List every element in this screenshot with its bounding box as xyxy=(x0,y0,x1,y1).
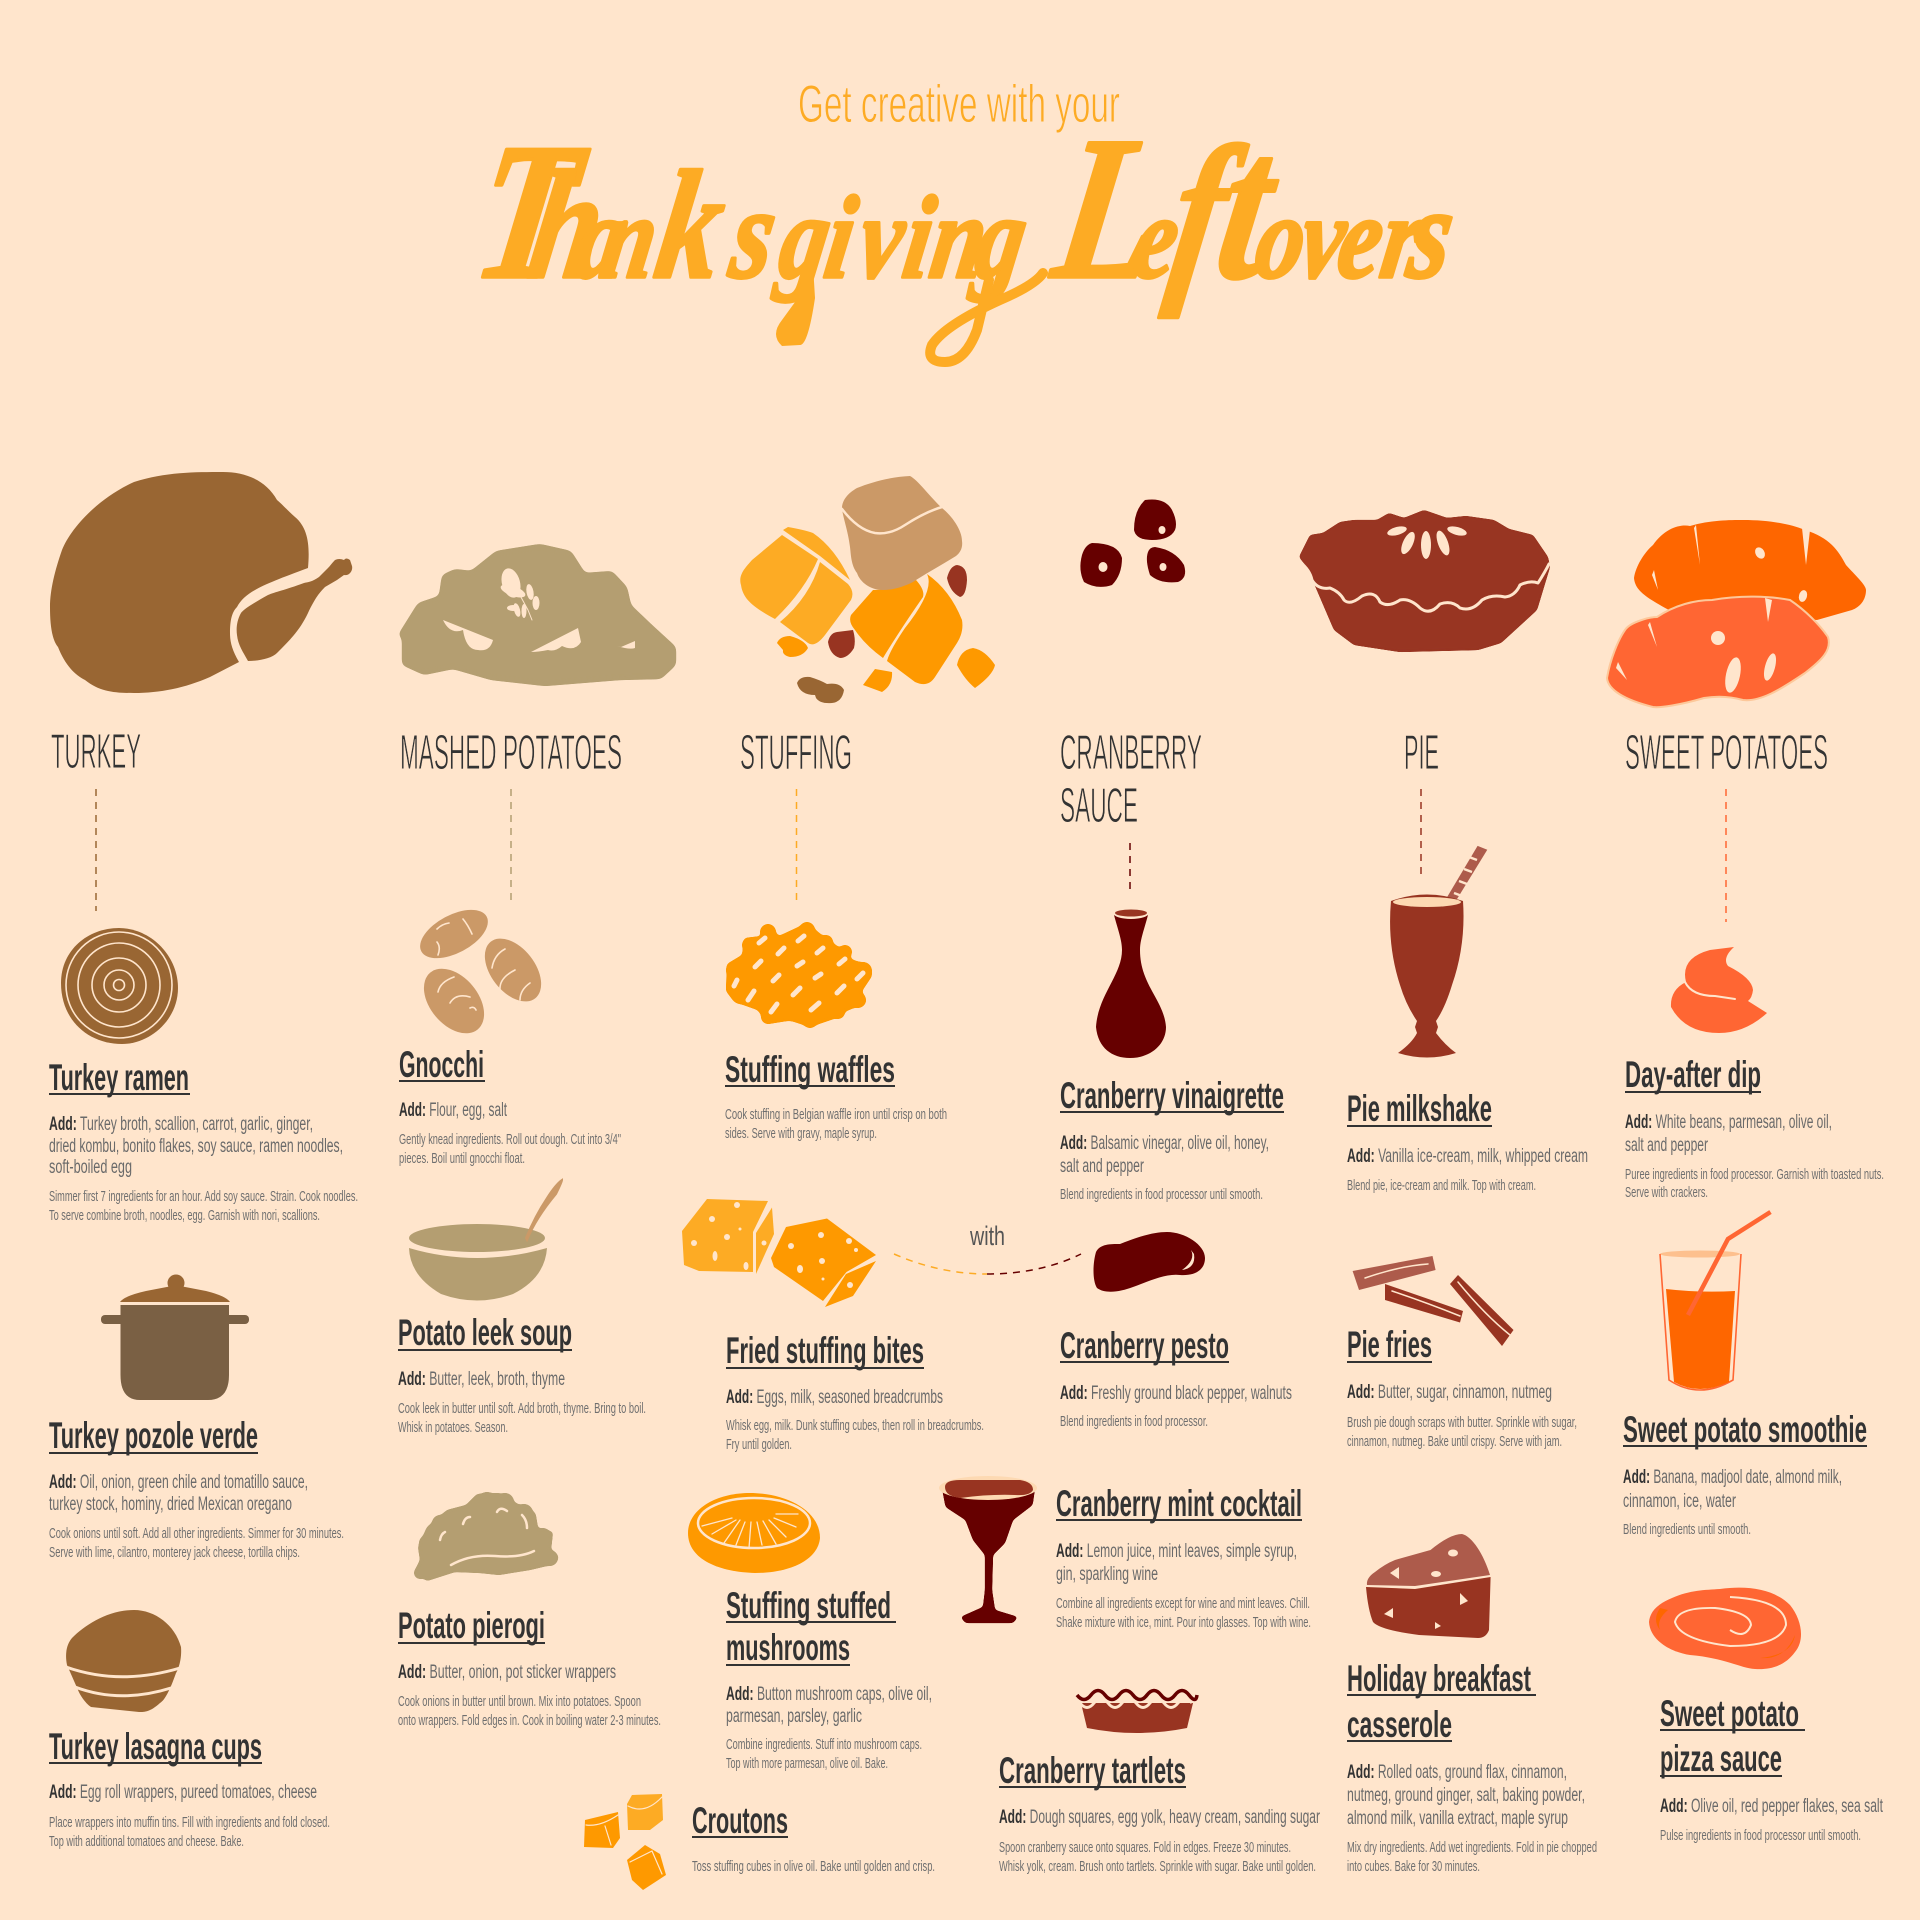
recipe: Potato pierogi xyxy=(398,1605,661,1729)
ingredients: gin, sparkling wine xyxy=(1056,1564,1158,1585)
ingredients: Add: Lemon juice, mint leaves, simple syrup, xyxy=(1056,1541,1297,1562)
recipe: Gnocchi xyxy=(399,1044,621,1167)
recipe: Stuffing waffles xyxy=(725,1049,947,1142)
label: cranberry sauce: SAUCE xyxy=(1060,779,1138,833)
panel: stuffing xyxy=(584,476,1081,1890)
instructions: onto wrappers. Fold edges in. Cook in boiling water 2-3 minutes. xyxy=(398,1713,661,1729)
instructions: Cook leek in butter until soft. Add broth, thyme. Bring to boil. xyxy=(398,1401,646,1417)
ingredients: Add: Dough squares, egg yolk, heavy cream, sanding sugar xyxy=(999,1807,1320,1828)
heading: Cranberry tartlets xyxy=(999,1750,1186,1791)
title: e xyxy=(1330,173,1393,303)
title: n xyxy=(593,173,667,303)
heading: Sweet potato xyxy=(1660,1693,1799,1734)
instructions xyxy=(725,1107,947,1142)
recipe: Cranberry pesto xyxy=(1060,1325,1292,1430)
recipe: Fried stuffing bites xyxy=(726,1330,984,1453)
instructions xyxy=(399,1132,621,1167)
recipe: Cranberry vinaigrette xyxy=(1060,1075,1284,1203)
ingredients xyxy=(726,1684,932,1727)
recipe: Cranberry mint cocktail xyxy=(1056,1483,1311,1631)
ingredients: salt and pepper xyxy=(1060,1156,1144,1177)
recipe: Cranberry tartlets xyxy=(999,1750,1320,1875)
instructions xyxy=(49,1815,330,1850)
instructions: into cubes. Bake for 30 minutes. xyxy=(1347,1859,1480,1875)
ingredients: Add: Rolled oats, ground flax, cinnamon, xyxy=(1347,1762,1567,1783)
title: s xyxy=(1399,161,1464,305)
ingredients: cinnamon, ice, water xyxy=(1623,1491,1736,1512)
heading: Turkey ramen xyxy=(49,1057,189,1098)
icon: cranberries xyxy=(1080,499,1185,587)
icon: fried stuffing cubes xyxy=(682,1199,876,1307)
ingredients: soft-boiled egg xyxy=(49,1157,132,1178)
icon: pierogi xyxy=(414,1492,559,1581)
instructions: Whisk in potatoes. Season. xyxy=(398,1420,508,1436)
instructions xyxy=(1056,1596,1311,1631)
ingredients: parmesan, parsley, garlic xyxy=(726,1706,862,1727)
ingredients: Add: Butter, leek, broth, thyme xyxy=(398,1369,565,1390)
ingredients: Add: Button mushroom caps, olive oil, xyxy=(726,1684,932,1705)
recipe: Pie fries xyxy=(1347,1324,1577,1450)
heading xyxy=(1660,1693,1805,1779)
icon: mashed potatoes xyxy=(398,544,676,686)
instructions: Cook onions in butter until brown. Mix into potatoes. Spoon xyxy=(398,1694,641,1710)
heading: Cranberry mint cocktail xyxy=(1056,1483,1302,1524)
instructions: Whisk yolk, cream. Brush onto tartlets. Sprinkle with sugar. Bake until golden. xyxy=(999,1859,1316,1875)
ingredients: nutmeg, ground ginger, salt, baking powder, xyxy=(1347,1785,1585,1806)
title: T xyxy=(463,104,598,320)
heading xyxy=(692,1800,788,1841)
heading: Potato pierogi xyxy=(398,1605,545,1646)
instructions: Top with additional tomatoes and cheese. Bake. xyxy=(49,1834,244,1850)
instructions: Blend ingredients in food processor. xyxy=(1060,1414,1208,1430)
instructions: Blend pie, ice-cream and milk. Top with cream. xyxy=(1347,1178,1536,1194)
heading: Stuffing stuffed xyxy=(726,1585,891,1626)
instructions: Cook stuffing in Belgian waffle iron until crisp on both xyxy=(725,1107,947,1123)
instructions xyxy=(49,1189,358,1224)
icon: pesto blob xyxy=(1094,1232,1205,1292)
instructions: Gently knead ingredients. Roll out dough. Cut into 3/4" xyxy=(399,1132,621,1148)
panel: stuffing: STUFFING xyxy=(740,726,852,780)
icon: stuffing pile xyxy=(740,476,995,703)
heading: Turkey pozole verde xyxy=(49,1415,258,1456)
ingredients: Add: Butter, onion, pot sticker wrappers xyxy=(398,1662,616,1683)
title: i xyxy=(896,173,943,303)
icon: smoothie xyxy=(1660,1212,1770,1390)
instructions: Fry until golden. xyxy=(726,1437,792,1453)
connector: with xyxy=(894,1221,1081,1274)
recipe: Stuffing stuffed mushrooms xyxy=(726,1585,932,1772)
ingredients: Add: Turkey broth, scallion, carrot, garlic, ginger, xyxy=(49,1114,313,1135)
ingredients: turkey stock, hominy, dried Mexican oregano xyxy=(49,1494,292,1515)
ingredients xyxy=(1347,1762,1585,1829)
instructions xyxy=(726,1418,984,1453)
instructions: Spoon cranberry sauce onto squares. Fold in edges. Freeze 30 minutes. xyxy=(999,1840,1291,1856)
panel: cranberry sauce xyxy=(939,499,1320,1875)
heading: casserole xyxy=(1347,1704,1452,1745)
recipe: Turkey pozole verde xyxy=(49,1415,344,1561)
recipe: Day-after dip xyxy=(1625,1054,1884,1201)
heading xyxy=(1347,1658,1536,1745)
heading: Holiday breakfast xyxy=(1347,1658,1531,1699)
instructions: sides. Serve with gravy, maple syrup. xyxy=(725,1126,877,1142)
icon: sweet potatoes xyxy=(1607,520,1866,707)
instructions xyxy=(726,1737,922,1772)
title: t xyxy=(1205,91,1292,323)
heading: pizza sauce xyxy=(1660,1738,1782,1779)
title: n xyxy=(923,173,996,303)
ingredients xyxy=(1056,1541,1297,1585)
panel: mashed potatoes: MASHED POTATOES xyxy=(400,726,622,780)
instructions: Serve with crackers. xyxy=(1625,1185,1708,1201)
panel: pie: PIE xyxy=(1404,726,1439,780)
title: L xyxy=(1041,95,1179,322)
heading: Pie fries xyxy=(1347,1324,1432,1365)
instructions: cinnamon, nutmeg. Bake until crispy. Serve with jam. xyxy=(1347,1434,1562,1450)
recipe: Potato leek soup xyxy=(398,1312,646,1436)
instructions: Combine ingredients. Stuff into mushroom caps. xyxy=(726,1737,922,1753)
heading: Day-after dip xyxy=(1625,1054,1761,1095)
panel: mashed potatoes xyxy=(398,544,676,1729)
instructions: Cook onions until soft. Add all other ingredients. Simmer for 30 minutes. xyxy=(49,1526,344,1542)
icon: milkshake xyxy=(1390,843,1488,1058)
title: o xyxy=(1248,173,1316,303)
ingredients: Add: Vanilla ice-cream, milk, whipped cream xyxy=(1347,1146,1588,1167)
heading: Cranberry vinaigrette xyxy=(1060,1075,1284,1116)
title: g xyxy=(770,173,840,303)
connector: with: with xyxy=(969,1221,1005,1251)
ingredients xyxy=(49,1114,343,1178)
ingredients: Add: Flour, egg, salt xyxy=(399,1100,507,1121)
heading: Gnocchi xyxy=(399,1044,484,1085)
icon: gnocchi xyxy=(412,900,553,1045)
title: v xyxy=(851,173,915,303)
heading xyxy=(726,1585,896,1668)
icon: pizza sauce swirl xyxy=(1649,1588,1801,1669)
instructions xyxy=(1625,1167,1884,1201)
icon: soup bowl xyxy=(409,1180,562,1300)
instructions: Mix dry ingredients. Add wet ingredients. Fold in pie chopped xyxy=(1347,1840,1597,1856)
panel: turkey xyxy=(49,472,358,1850)
icon: turkey xyxy=(50,472,352,693)
recipe: Turkey lasagna cups xyxy=(49,1726,330,1850)
title: i xyxy=(817,173,864,303)
title xyxy=(462,91,1475,362)
recipe: Sweet potato smoothie xyxy=(1623,1409,1867,1538)
instructions xyxy=(49,1526,344,1561)
icon: waffle xyxy=(726,922,872,1028)
title: g xyxy=(966,173,1059,303)
icon: pie fries xyxy=(1353,1256,1514,1346)
ingredients xyxy=(1623,1467,1842,1512)
ingredients: Add: Eggs, milk, seasoned breadcrumbs xyxy=(726,1387,943,1408)
instructions: Serve with lime, cilantro, monterey jack cheese, tortilla chips. xyxy=(49,1545,300,1561)
instructions: Blend ingredients in food processor until smooth. xyxy=(1060,1187,1263,1203)
instructions: Simmer first 7 ingredients for an hour. Add soy sauce. Strain. Cook noodles. xyxy=(49,1189,358,1205)
icon: lasagna cup xyxy=(66,1610,181,1712)
recipe: Pie milkshake xyxy=(1347,1088,1588,1194)
instructions: To serve combine broth, noodles, egg. Garnish with nori, scallions. xyxy=(49,1208,320,1224)
instructions: Place wrappers into muffin tins. Fill with ingredients and fold closed. xyxy=(49,1815,330,1831)
icon: vinaigrette carafe xyxy=(1096,907,1166,1058)
icon: pot xyxy=(101,1274,249,1400)
icon: pie xyxy=(1299,510,1550,652)
heading xyxy=(1347,1324,1432,1365)
ingredients xyxy=(1060,1133,1269,1177)
heading xyxy=(399,1044,485,1085)
icon: day-after dip xyxy=(1671,947,1767,1033)
instructions: Blend ingredients until smooth. xyxy=(1623,1522,1751,1538)
instructions: pieces. Boil until gnocchi float. xyxy=(399,1151,525,1167)
instructions xyxy=(1347,1840,1597,1875)
heading: Stuffing waffles xyxy=(725,1049,895,1090)
panel: sweet potatoes xyxy=(1607,520,1884,1844)
recipe: Sweet potato pizza sauce xyxy=(1660,1693,1883,1844)
label: cranberry sauce xyxy=(1060,726,1202,833)
instructions: Shake mixture with ice, mint. Pour into glasses. Top with wine. xyxy=(1056,1615,1311,1631)
heading: Pie milkshake xyxy=(1347,1088,1492,1129)
title: e xyxy=(1125,173,1188,303)
panel: pie xyxy=(1299,510,1597,1875)
ingredients: Add: Egg roll wrappers, pureed tomatoes, cheese xyxy=(49,1782,317,1803)
heading: Potato leek soup xyxy=(398,1312,572,1353)
instructions xyxy=(999,1840,1316,1875)
heading: Turkey lasagna cups xyxy=(49,1726,262,1767)
recipe: Turkey ramen xyxy=(49,1057,358,1224)
instructions: Brush pie dough scraps with butter. Sprinkle with sugar, xyxy=(1347,1415,1577,1431)
ingredients xyxy=(49,1472,308,1515)
recipe: Croutons xyxy=(692,1800,935,1875)
title: v xyxy=(1293,173,1356,303)
ingredients: Add: Balsamic vinegar, olive oil, honey, xyxy=(1060,1133,1269,1154)
instructions xyxy=(398,1694,661,1729)
instructions: Toss stuffing cubes in olive oil. Bake until golden and crisp. xyxy=(692,1859,935,1875)
title: s xyxy=(722,161,786,305)
title: f xyxy=(1158,109,1255,319)
subtitle: Get creative with your xyxy=(798,75,1120,134)
ingredients: Add: Oil, onion, green chile and tomatillo sauce, xyxy=(49,1472,308,1493)
heading: Cranberry pesto xyxy=(1060,1325,1229,1366)
ingredients: Add: Freshly ground black pepper, walnuts xyxy=(1060,1383,1292,1404)
instructions xyxy=(1347,1415,1577,1450)
icon: tartlet xyxy=(1077,1690,1197,1733)
instructions: Combine all ingredients except for wine and mint leaves. Chill. xyxy=(1056,1596,1310,1612)
ingredients: almond milk, vanilla extract, maple syrup xyxy=(1347,1808,1568,1829)
heading: Croutons xyxy=(692,1800,788,1841)
icon: stuffed mushroom xyxy=(688,1493,820,1573)
instructions: Top with more parmesan, olive oil. Bake. xyxy=(726,1756,888,1772)
panel: cranberry sauce: CRANBERRY xyxy=(1060,726,1202,780)
icon: cocktail glass xyxy=(939,1476,1037,1623)
title: a xyxy=(569,173,636,303)
ingredients xyxy=(1625,1112,1832,1156)
icon: croutons xyxy=(584,1794,666,1890)
icon: ramen bowl xyxy=(61,928,178,1044)
title: k xyxy=(647,139,736,311)
ingredients: Add: Butter, sugar, cinnamon, nutmeg xyxy=(1347,1382,1552,1403)
ingredients: salt and pepper xyxy=(1625,1135,1708,1156)
panel: turkey: TURKEY xyxy=(51,725,141,779)
title: r xyxy=(1373,173,1432,303)
instructions: Whisk egg, milk. Dunk stuffing cubes, then roll in breadcrumbs. xyxy=(726,1418,984,1434)
ingredients: dried kombu, bonito flakes, soy sauce, ramen noodles, xyxy=(49,1136,343,1157)
icon: casserole slice xyxy=(1366,1534,1491,1638)
heading xyxy=(1625,1054,1761,1095)
recipe: Holiday breakfast casserole xyxy=(1347,1658,1597,1875)
heading: Fried stuffing bites xyxy=(726,1330,924,1371)
heading: mushrooms xyxy=(726,1627,850,1668)
title: h xyxy=(519,139,616,311)
instructions xyxy=(398,1401,646,1436)
